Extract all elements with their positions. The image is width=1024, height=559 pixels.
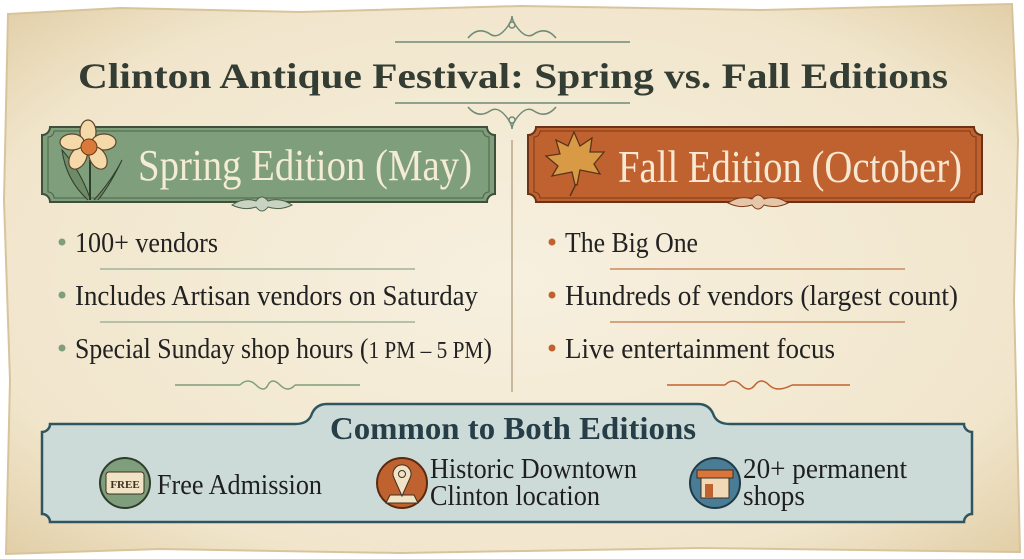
title — [78, 16, 948, 129]
spring banner: Spring Edition (May) — [138, 141, 472, 190]
icon: maple leaf — [546, 132, 604, 196]
panel: spring — [42, 120, 495, 389]
item: location: Historic Downtown — [430, 453, 637, 485]
ornament spring bottom — [175, 381, 360, 389]
fall bullets: Live entertainment focus — [565, 333, 835, 365]
item: shops: shops — [743, 480, 805, 512]
item: location: Clinton location — [430, 480, 600, 512]
fall banner — [528, 127, 982, 209]
item: location — [377, 453, 637, 512]
fall bullets: Hundreds of vendors (largest count) — [565, 280, 958, 312]
spring bullets: 100+ vendors — [75, 227, 218, 259]
spring bullets — [58, 227, 492, 365]
ornament top — [468, 16, 556, 38]
fall bullets: The Big One — [565, 227, 698, 259]
icon: daffodil — [60, 120, 122, 200]
divider vertical — [511, 140, 513, 392]
item: free admission: Free Admission — [157, 469, 322, 501]
ornament bottom — [468, 107, 556, 129]
fall bullets — [548, 227, 958, 365]
spring bullets: Includes Artisan vendors on Saturday — [75, 280, 478, 312]
item: free admission — [100, 458, 322, 508]
item: free admission: FREE — [110, 479, 140, 491]
panel: fall — [528, 127, 982, 389]
item: shops — [690, 453, 907, 512]
common heading: Common to Both Editions — [330, 410, 696, 446]
ornament fall bottom — [667, 381, 850, 389]
spring banner — [42, 127, 495, 211]
item: shops: 20+ permanent — [743, 453, 907, 485]
spring bullets: Special Sunday shop hours (1 PM – 5 PM) — [75, 333, 492, 365]
fall banner: Fall Edition (October) — [618, 141, 962, 192]
panel: common — [42, 404, 972, 522]
title: Clinton Antique Festival: Spring vs. Fall Editions — [78, 56, 948, 96]
